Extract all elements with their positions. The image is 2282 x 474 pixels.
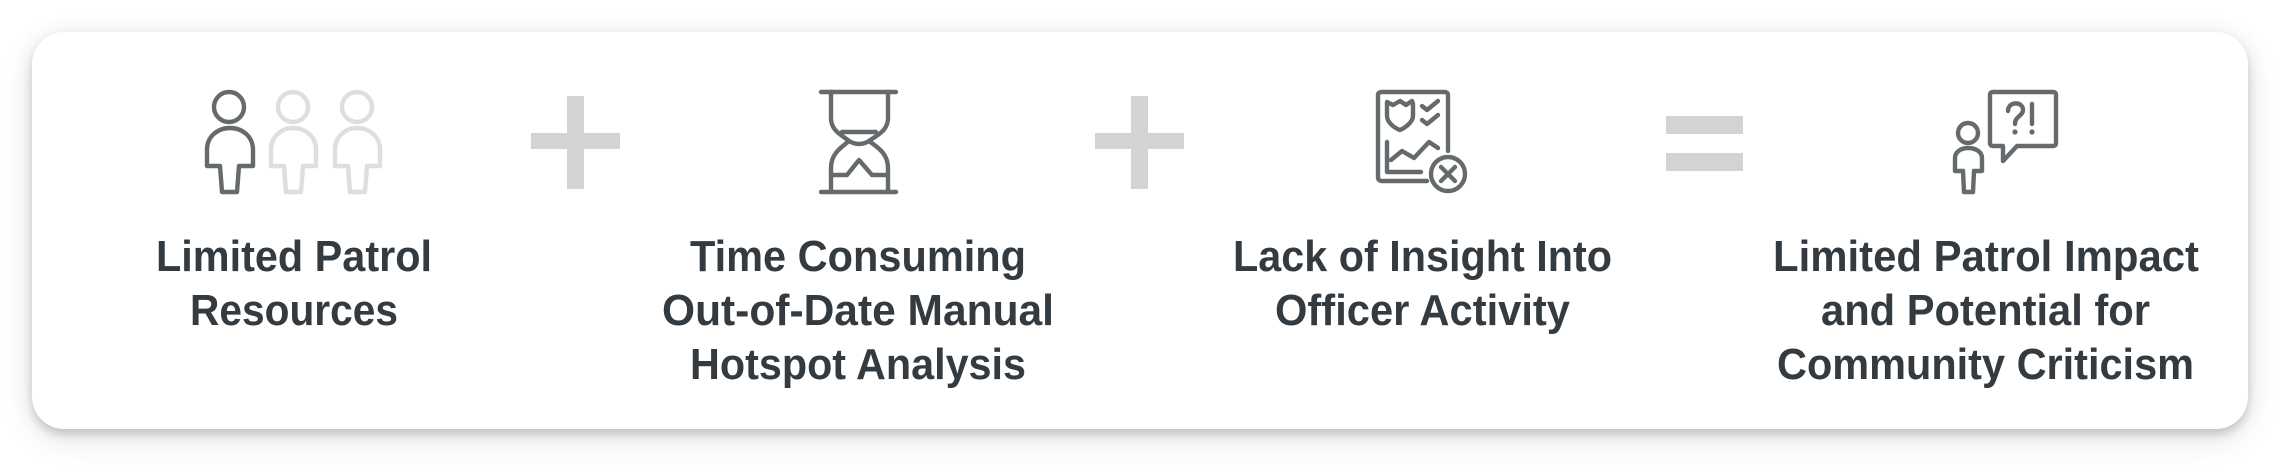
heading: time consuming manual analysis xyxy=(662,232,1054,389)
heading: time consuming manual analysis: Out-of-Date Manual xyxy=(662,286,1054,335)
heading: limited patrol impact: Limited Patrol Impact xyxy=(1773,232,2199,281)
heading: time consuming manual analysis: Time Consuming xyxy=(690,232,1026,281)
heading: time consuming manual analysis: Hotspot Analysis xyxy=(690,340,1026,389)
heading: limited patrol impact: and Potential for xyxy=(1821,286,2150,335)
icon: officer with speech bubble xyxy=(1955,92,2056,192)
icon: three patrol officers, one active xyxy=(207,92,380,192)
plus sign two xyxy=(1095,96,1184,189)
heading: limited patrol impact: Community Criticism xyxy=(1777,340,2194,389)
icon: hourglass xyxy=(821,92,896,192)
heading: limited patrol resources: Resources xyxy=(190,286,398,335)
heading: limited patrol resources xyxy=(156,232,432,335)
heading: limited patrol resources: Limited Patrol xyxy=(156,232,432,281)
icon: report with shield, chart and x mark xyxy=(1378,92,1465,191)
heading: lack of insight: Lack of Insight Into xyxy=(1233,232,1612,281)
equals sign xyxy=(1666,116,1743,171)
heading: limited patrol impact xyxy=(1773,232,2199,389)
plus sign one xyxy=(531,96,620,189)
heading: lack of insight: Officer Activity xyxy=(1275,286,1570,335)
heading: lack of insight xyxy=(1233,232,1612,335)
